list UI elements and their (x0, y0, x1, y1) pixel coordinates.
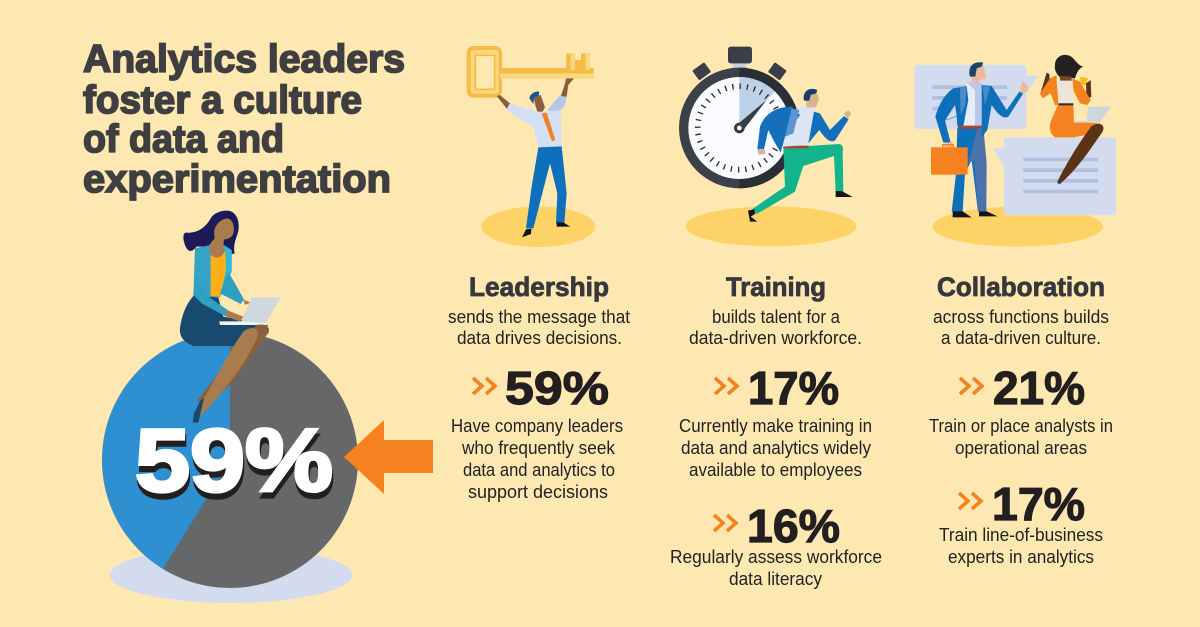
text: 17 percent description: data and analytics widely (681, 438, 871, 458)
text: training intro: data-driven workforce. (689, 328, 862, 348)
panel: leadership (448, 272, 630, 502)
text: 16 percent description: data literacy (729, 569, 822, 589)
title: of data and (83, 118, 284, 161)
text: 16 percent description (670, 547, 882, 589)
text: 17 percent description (679, 416, 872, 480)
speech bubble front (993, 137, 1116, 215)
text: 21 percent description: Train or place analysts in (929, 416, 1113, 436)
title: experimentation (83, 158, 391, 201)
text: leadership intro: sends the message that (448, 307, 630, 327)
key (467, 46, 594, 98)
text: 59 percent description: data and analytics to (463, 460, 615, 480)
text: leadership intro (448, 307, 630, 348)
running man (748, 89, 853, 222)
text: training intro (689, 307, 862, 348)
title (83, 38, 405, 201)
man with briefcase (931, 62, 1028, 217)
text: collaboration intro (933, 307, 1109, 348)
stat: 17 percent: 17% (748, 362, 839, 414)
text: 16 percent description: Regularly assess workforce (670, 547, 882, 567)
heading: training: Training (726, 272, 826, 302)
text: 59 percent description: support decisions (468, 482, 608, 502)
icon: man holding key (467, 46, 595, 247)
big percentage label: 59% (136, 416, 334, 516)
text: 21 percent description (929, 416, 1113, 458)
icon: colleagues and speech bubbles (915, 55, 1116, 247)
pie chart: 59 percent (102, 332, 358, 603)
arrow pointing to pie (344, 420, 433, 494)
panel: collaboration (929, 272, 1113, 567)
text: collaboration intro: a data-driven culture. (941, 328, 1101, 348)
big percentage label: 59% (135, 410, 333, 510)
text: 21 percent description: operational areas (955, 438, 1087, 458)
icon: chevrons (960, 378, 982, 394)
stat: second 17 percent: 17% (992, 478, 1085, 530)
stat: 59 percent: 59% (505, 362, 609, 414)
stopwatch (679, 47, 800, 188)
text: collaboration intro: across functions builds (933, 307, 1109, 327)
text: 17 percent description: Currently make training in (679, 416, 872, 436)
text: training intro: builds talent for a (712, 307, 841, 327)
icon: chevrons (714, 515, 736, 531)
icon: stopwatch and running man (679, 47, 856, 246)
text: 59 percent description: Have company leaders (451, 416, 623, 436)
speech bubble back (915, 65, 1038, 129)
text: 17 percent description: available to employees (689, 460, 862, 480)
text: second 17 percent description: Train line-of-business (939, 525, 1103, 545)
stat: 16 percent: 16% (747, 500, 840, 552)
woman with coffee and laptop (1040, 55, 1111, 184)
icon: chevrons (715, 378, 737, 394)
text: 59 percent description: who frequently seek (461, 438, 616, 458)
text: second 17 percent description (939, 525, 1103, 567)
stat: 21 percent: 21% (993, 362, 1085, 414)
heading: collaboration: Collaboration (937, 272, 1105, 302)
text: leadership intro: data drives decisions. (457, 328, 622, 348)
heading: leadership: Leadership (469, 272, 609, 302)
icon: woman with laptop sitting on pie (180, 211, 281, 423)
icon: chevrons (959, 493, 981, 509)
panel: training (670, 272, 882, 589)
title: foster a culture (83, 79, 362, 122)
title: Analytics leaders (83, 38, 405, 81)
icon: chevrons (473, 378, 495, 394)
text: second 17 percent description: experts in analytics (948, 547, 1094, 567)
text: 59 percent description (451, 416, 623, 502)
